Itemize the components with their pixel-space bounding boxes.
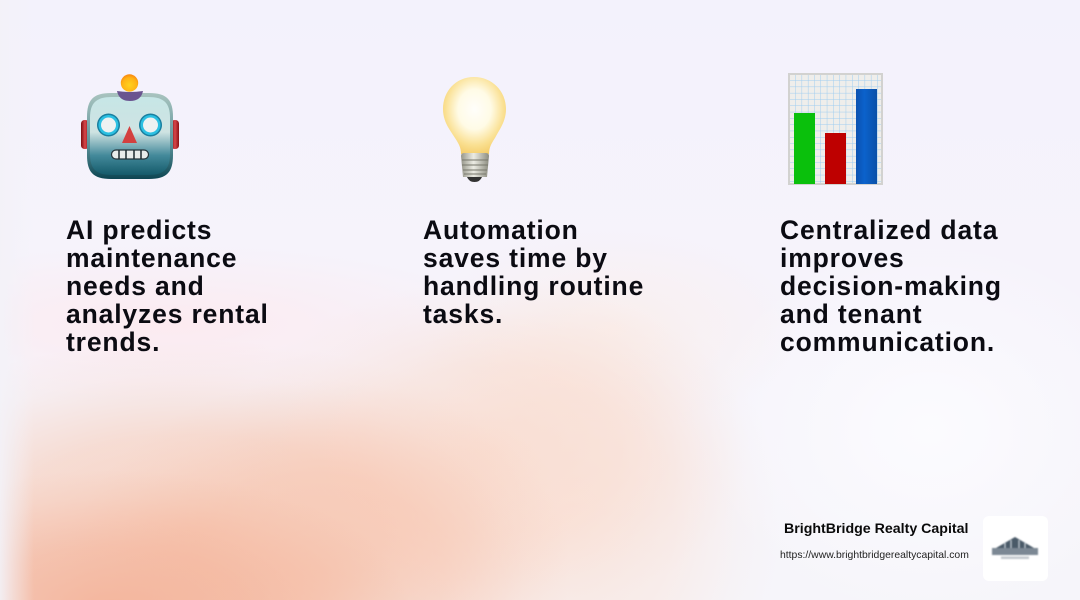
- text: centralized data benefit: [780, 215, 1002, 357]
- website url: https://www.brightbridgerealtycapital.com: [780, 550, 969, 561]
- text: AI benefit: analyzes rental: [66, 299, 269, 329]
- text: AI benefit: maintenance: [66, 243, 237, 273]
- icon: robot face: [81, 74, 179, 179]
- text: automation benefit: Automation: [423, 215, 579, 245]
- text: automation benefit: [423, 215, 644, 329]
- text: centralized data benefit: communication.: [780, 327, 995, 357]
- text: AI benefit: AI predicts: [66, 215, 212, 245]
- text: centralized data benefit: decision-making: [780, 271, 1002, 301]
- text: centralized data benefit: and tenant: [780, 299, 922, 329]
- icon: company logo: [991, 536, 1039, 560]
- text: automation benefit: tasks.: [423, 299, 503, 329]
- logo card: [983, 516, 1048, 581]
- brand name: BrightBridge Realty Capital: [784, 521, 968, 537]
- text: AI benefit: [66, 215, 269, 357]
- icon: light bulb: [443, 77, 506, 182]
- text: centralized data benefit: improves: [780, 243, 905, 273]
- text: AI benefit: needs and: [66, 271, 205, 301]
- text: automation benefit: handling routine: [423, 271, 644, 301]
- text: AI benefit: trends.: [66, 327, 160, 357]
- text: automation benefit: saves time by: [423, 243, 608, 273]
- text: centralized data benefit: Centralized data: [780, 215, 998, 245]
- icon: bar chart: [788, 73, 883, 185]
